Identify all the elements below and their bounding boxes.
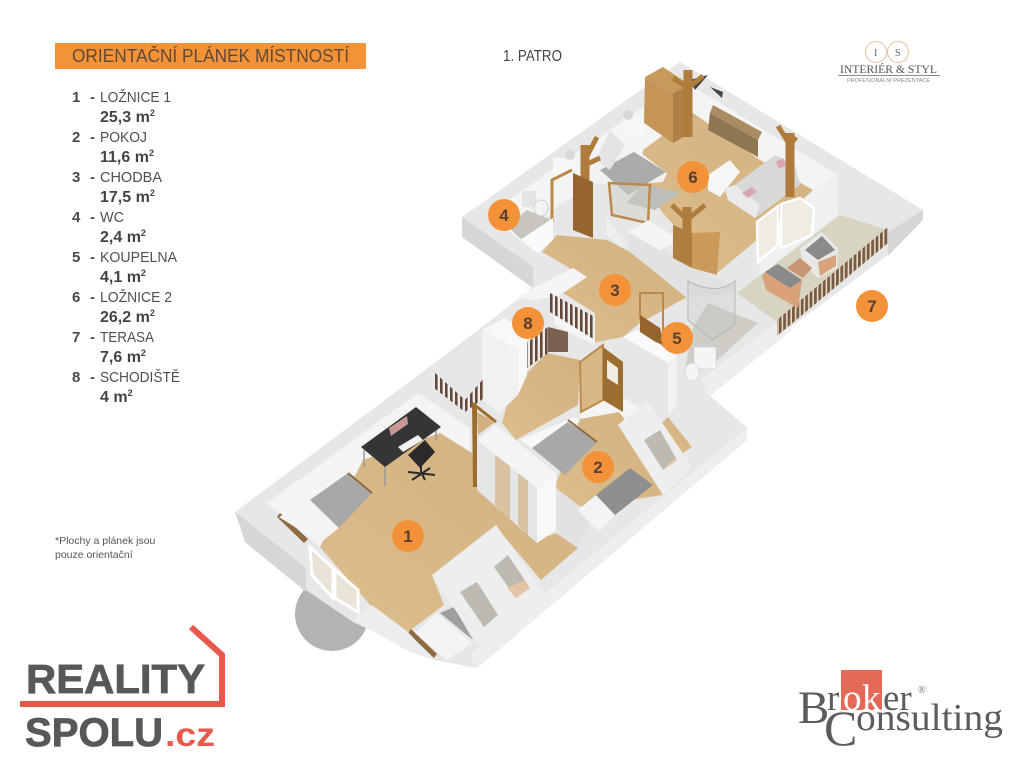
- logo: Broker Consulting: C: [824, 700, 857, 756]
- beams room 6: [585, 70, 796, 197]
- roof ledge over stairs: [517, 268, 587, 300]
- room legend: LOŽNICE 1: [100, 89, 171, 106]
- badge 5: [661, 322, 693, 354]
- coffee table: [708, 160, 740, 197]
- room legend: CHODBA: [100, 169, 162, 186]
- logo: Broker Consulting: er: [883, 678, 912, 719]
- balcony door: [310, 547, 358, 612]
- room legend: 2: [128, 388, 133, 398]
- footnote: [55, 535, 156, 561]
- room legend: 3: [72, 169, 80, 186]
- roof window shadows: [690, 75, 723, 98]
- badge 3: [599, 274, 631, 306]
- wardrobe lower room 6: [673, 225, 720, 275]
- toilet bathroom: [685, 347, 716, 381]
- newel post: [548, 327, 568, 352]
- railing near room 1: [434, 372, 484, 412]
- room legend: -: [90, 89, 95, 106]
- room legend: -: [90, 289, 95, 306]
- building walls: [235, 62, 923, 668]
- terrace railing: [777, 227, 888, 336]
- terrace floor: [737, 215, 888, 322]
- room legend: 6: [72, 289, 80, 306]
- badge 4: [488, 199, 520, 231]
- badge 8: [512, 307, 544, 339]
- room legend: WC: [100, 209, 124, 226]
- logo: Broker Consulting: [798, 670, 1003, 756]
- door bathroom: [640, 293, 665, 346]
- logo: Reality Spolu: SPOLU: [25, 711, 163, 755]
- bed room 6: [590, 130, 667, 195]
- room legend: 5: [72, 249, 80, 266]
- wall front faces: [235, 210, 923, 592]
- room legend: -: [90, 329, 95, 346]
- wall room 2 top: [520, 417, 580, 448]
- room legend: 2: [141, 348, 146, 358]
- dresser: [708, 105, 762, 157]
- room legend: -: [90, 249, 95, 266]
- badge 6: 6: [688, 168, 698, 187]
- door frame room 1: [472, 403, 496, 487]
- logo: Reality Spolu: REALITY: [26, 656, 205, 702]
- badge 4: 4: [499, 206, 509, 225]
- terrace glass doors: [757, 198, 814, 262]
- room legend: -: [90, 169, 95, 186]
- badge 2: [582, 451, 614, 483]
- room legend: -: [90, 209, 95, 226]
- glass door: [609, 183, 650, 223]
- roof window slab small: [618, 400, 692, 495]
- logo: Interiér & Styl: I: [874, 48, 877, 59]
- chimney pillar: [482, 318, 527, 413]
- room legend: 8: [72, 369, 80, 386]
- room 3 hallway floor: [542, 235, 687, 343]
- room legend: 7,6 m: [100, 349, 141, 366]
- footnote: *Plochy a plánek jsou: [55, 535, 156, 547]
- badge 7: [856, 290, 888, 322]
- bed room 2 bottom: [578, 468, 653, 532]
- floor plan 3D render: [235, 62, 923, 668]
- bed room 1 left: [277, 473, 372, 543]
- logo: Broker Consulting: ok: [843, 678, 881, 719]
- stairwell: [550, 293, 595, 345]
- logo: Interiér & Styl: [838, 42, 940, 84]
- white wardrobe lower: [477, 425, 556, 543]
- room legend: 4,1 m: [100, 269, 141, 286]
- logo: Interiér & Styl: INTERIÉR & STYL: [840, 62, 937, 76]
- badge 2: 2: [593, 458, 603, 477]
- room legend: -: [90, 129, 95, 146]
- heading banner: ORIENTAČNÍ PLÁNEK MÍSTNOSTÍ: [72, 45, 350, 66]
- room 4 lower wall: [520, 218, 553, 253]
- logo: Interiér & Styl: S: [895, 48, 901, 59]
- room legend: 17,5 m: [100, 189, 150, 206]
- room legend: [72, 89, 180, 406]
- stair railing lower: [517, 327, 548, 375]
- badge 8: 8: [523, 314, 533, 333]
- room legend: SCHODIŠTĚ: [100, 369, 180, 386]
- room legend: 2: [72, 129, 80, 146]
- room legend: 4 m: [100, 389, 128, 406]
- room legend: -: [90, 369, 95, 386]
- shower cabin: [688, 281, 735, 340]
- footnote: pouze orientační: [55, 549, 133, 561]
- terrace furniture: [762, 232, 838, 308]
- hallway lower floor: [502, 353, 580, 440]
- logo: Reality Spolu: .cz: [165, 716, 215, 753]
- room legend: 2: [150, 188, 155, 198]
- sofa: [725, 155, 800, 218]
- pillar bathroom: [623, 330, 677, 417]
- room legend: 2: [150, 308, 155, 318]
- wall room 2 divider: [556, 488, 596, 548]
- logo: Broker Consulting: ®: [918, 685, 926, 696]
- toilet: [522, 191, 548, 216]
- inner wall faces: [267, 85, 838, 547]
- badge 6: [677, 161, 709, 193]
- badge 1: 1: [403, 527, 413, 546]
- bed room 1 bottom: [408, 607, 473, 660]
- logo: Broker Consulting: onsulting: [856, 697, 1003, 739]
- room legend: 7: [72, 329, 80, 346]
- room legend: 2: [150, 108, 155, 118]
- room 1 floor: [320, 433, 578, 632]
- nightstands with lamps: [553, 110, 645, 173]
- room legend: 4: [72, 209, 81, 226]
- badge 5: 5: [672, 329, 682, 348]
- room legend: 1: [72, 89, 80, 106]
- room legend: POKOJ: [100, 129, 147, 146]
- office chair: [408, 440, 435, 480]
- floor label: 1. PATRO: [503, 48, 562, 65]
- room legend: 25,3 m: [100, 109, 150, 126]
- badge 1: [392, 520, 424, 552]
- wall room 6 and hallway: [628, 233, 737, 298]
- rug: [627, 183, 680, 210]
- room legend: 2: [149, 148, 154, 158]
- balcony disc: [295, 577, 369, 651]
- room legend: LOŽNICE 2: [100, 289, 172, 306]
- beam room 6 lower: [672, 205, 705, 262]
- roof window slab large: [432, 525, 546, 653]
- room legend: 11,6 m: [100, 149, 149, 166]
- room 6 floor: [643, 113, 813, 273]
- room legend: KOUPELNA: [100, 249, 177, 266]
- room 2 floor: [556, 412, 663, 508]
- room legend: 2,4 m: [100, 229, 141, 246]
- room legend: 2: [141, 268, 146, 278]
- logo: Reality Spolu: [20, 627, 222, 755]
- logo: Broker Consulting: B: [798, 682, 829, 734]
- badge 3: 3: [610, 281, 620, 300]
- badge 7: 7: [867, 297, 877, 316]
- desk: [361, 407, 441, 486]
- room 4 floor: [507, 210, 553, 240]
- terrace back wall: [757, 177, 838, 275]
- door hallway / room 2: [580, 345, 623, 412]
- logo: Broker Consulting: r: [827, 678, 839, 719]
- stair railing upper: [550, 293, 595, 340]
- wall end near balcony: [353, 605, 434, 660]
- room legend: 2: [141, 228, 146, 238]
- room legend: TERASA: [100, 329, 154, 346]
- logo: Interiér & Styl: PROFESIONÁLNÍ PREZENTACE: [847, 77, 930, 84]
- door WC: [552, 170, 593, 238]
- bathroom floor: [684, 303, 758, 375]
- bed room 2 top: [532, 420, 597, 475]
- light outer wall faces: [470, 318, 792, 668]
- wardrobe room 6: [644, 67, 690, 143]
- room legend: 26,2 m: [100, 309, 150, 326]
